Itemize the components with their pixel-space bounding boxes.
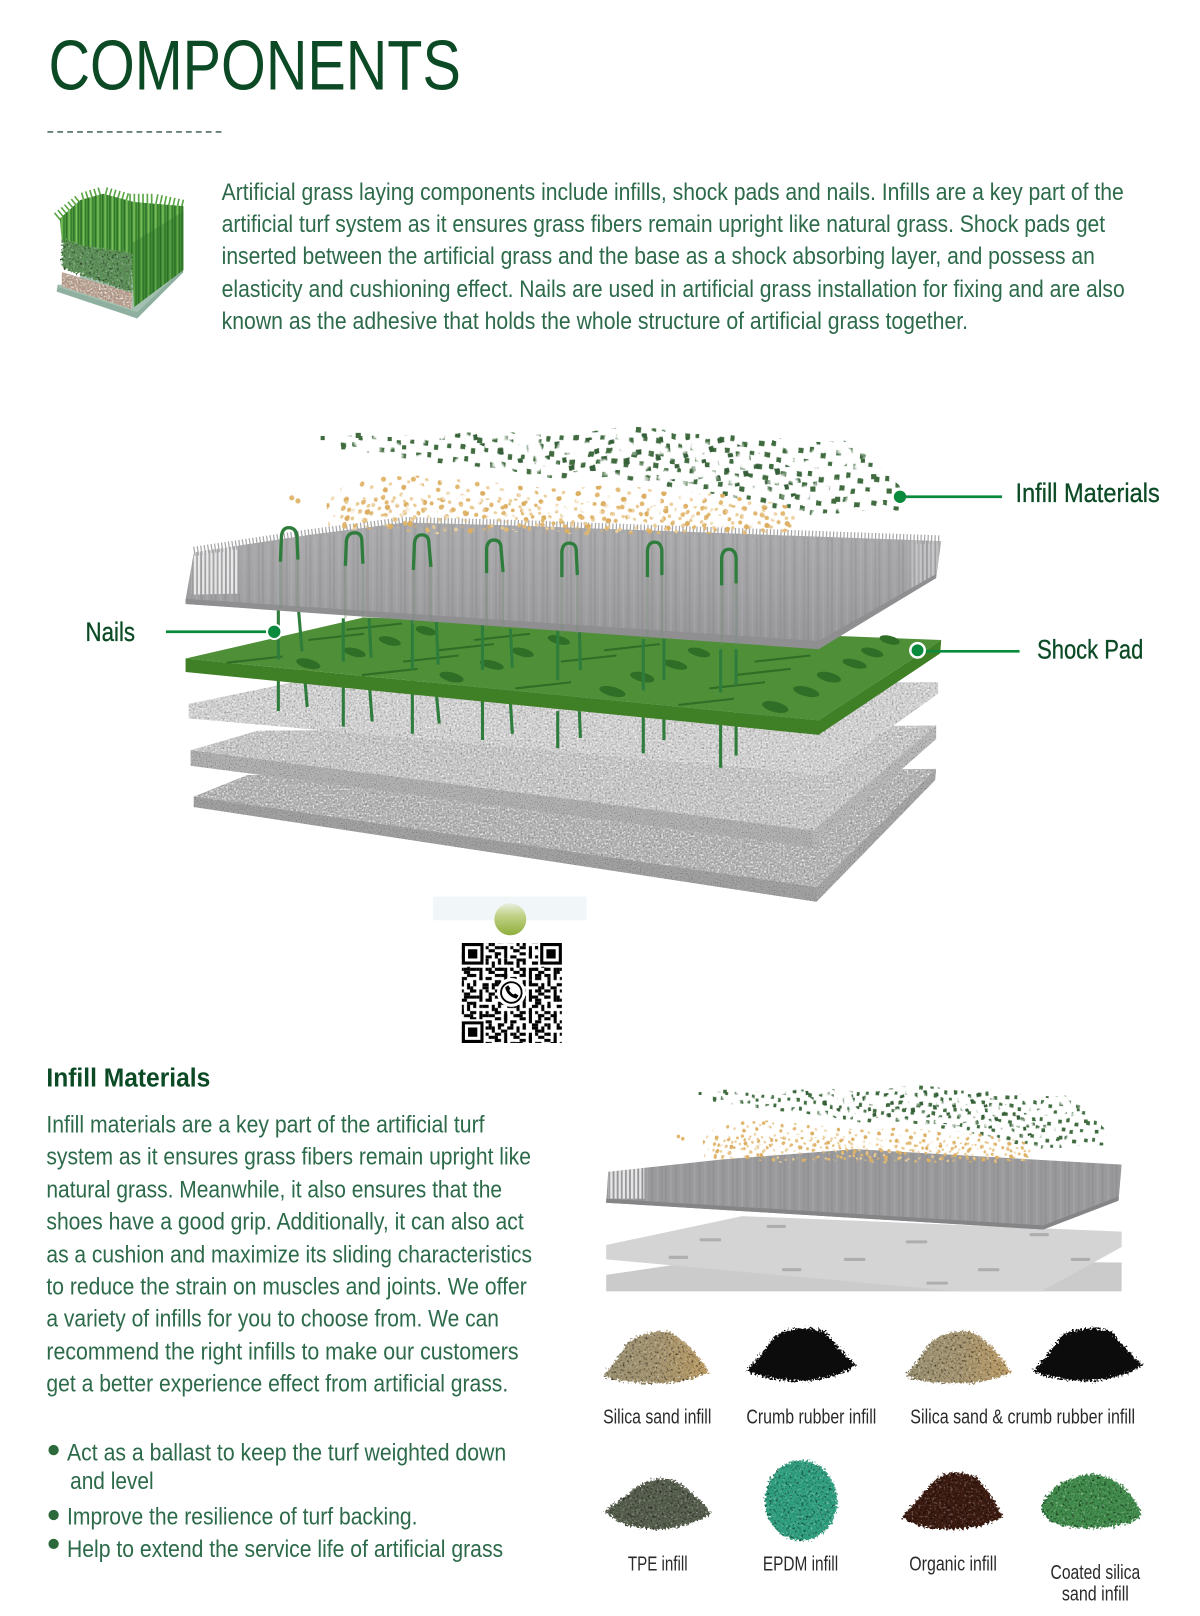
layer: top gravel	[189, 682, 938, 775]
dashed rule under the title	[47, 131, 224, 133]
text block: infill description: a variety of infills for you to choose from. We can	[46, 1306, 499, 1332]
infill sample: TPE: TPE infill	[628, 1553, 688, 1576]
callout: nails	[86, 617, 281, 647]
infill sample: coated silica sand: Coated silica	[1051, 1561, 1141, 1584]
nails: faint shafts through the turf	[280, 560, 736, 645]
particles: green and sand infill	[289, 430, 907, 538]
text block: infill description	[46, 1113, 532, 1397]
nails: U-shaped tops	[280, 528, 736, 585]
layer: bottom gravel base	[194, 769, 936, 902]
infill sample: crumb rubber: Crumb rubber infill	[746, 1405, 876, 1428]
text block: infill description: natural grass. Meanwhile, it also ensures that the	[46, 1178, 502, 1204]
infill sample: silica sand and crumb rubber	[905, 1328, 1142, 1428]
infill sample: TPE	[605, 1479, 711, 1576]
bullet list: infill benefits: and level	[70, 1469, 154, 1495]
infill sample: EPDM	[763, 1460, 838, 1576]
small diagram: infill layer highlighted	[606, 1088, 1122, 1291]
text block: infill description: get a better experience effect from artificial grass.	[46, 1371, 508, 1397]
text block: infill description: Infill materials are a key part of the artificial turf	[46, 1113, 485, 1139]
callout: infill materials: Infill Materials	[1015, 478, 1160, 508]
text block: infill description: as a cushion and maximize its sliding characteristics	[46, 1243, 532, 1268]
bullet list: infill benefits: Help to extend the service life of artificial grass	[67, 1537, 503, 1563]
icon: artificial grass sample block	[57, 194, 184, 318]
callout: shock pad	[910, 635, 1143, 665]
callout: infill materials	[894, 478, 1160, 508]
text block: introduction: known as the adhesive that holds the whole structure of artificial grass together.	[222, 309, 968, 335]
infill sample: coated silica sand	[1041, 1474, 1141, 1606]
banner with round logo	[433, 897, 587, 935]
infill sample: crumb rubber	[746, 1328, 876, 1428]
nails: lower legs	[278, 670, 736, 768]
layer: grey turf with fibers	[186, 521, 941, 649]
layer: middle gravel	[191, 726, 936, 847]
nails: upper legs above the pad	[278, 603, 736, 693]
infill sample: organic: Organic infill	[909, 1553, 997, 1576]
text block: introduction: inserted between the artificial grass and the base as a shock absorbing layer, and possess an	[222, 244, 1095, 270]
text block: introduction: artificial turf system as it ensures grass fibers remain upright like natural grass. Shock pads get	[222, 212, 1106, 238]
callout: nails: Nails	[86, 617, 135, 647]
exploded diagram: turf system layers	[186, 430, 941, 902]
infill sample: EPDM: EPDM infill	[763, 1553, 838, 1576]
bullet list: infill benefits: Act as a ballast to keep the turf weighted down	[67, 1440, 506, 1466]
bullet list: infill benefits	[48, 1440, 506, 1563]
text block: infill description: system as it ensures grass fibers remain upright like	[46, 1145, 531, 1171]
text block: introduction	[222, 180, 1125, 335]
text block: infill description: recommend the right infills to make our customers	[46, 1339, 519, 1365]
bullet list: infill benefits: Improve the resilience of turf backing.	[67, 1504, 418, 1530]
callout: shock pad: Shock Pad	[1037, 635, 1143, 665]
text block: infill description: to reduce the strain on muscles and joints. We offer	[46, 1274, 527, 1300]
infill sample: organic	[902, 1472, 1003, 1576]
layer: green shock pad	[186, 617, 941, 735]
infill sample: coated silica sand: sand infill	[1062, 1583, 1129, 1606]
text block: infill description: shoes have a good grip. Additionally, it can also act	[46, 1210, 524, 1236]
heading: infill materials: Infill Materials	[46, 1064, 210, 1092]
infill sample: silica sand	[603, 1331, 711, 1428]
title: COMPONENTS	[48, 27, 461, 105]
infill sample: silica sand and crumb rubber: Silica sand & crumb rubber infill	[910, 1405, 1135, 1428]
infill sample: silica sand: Silica sand infill	[603, 1405, 711, 1428]
QR code with WhatsApp mark	[462, 943, 562, 1043]
